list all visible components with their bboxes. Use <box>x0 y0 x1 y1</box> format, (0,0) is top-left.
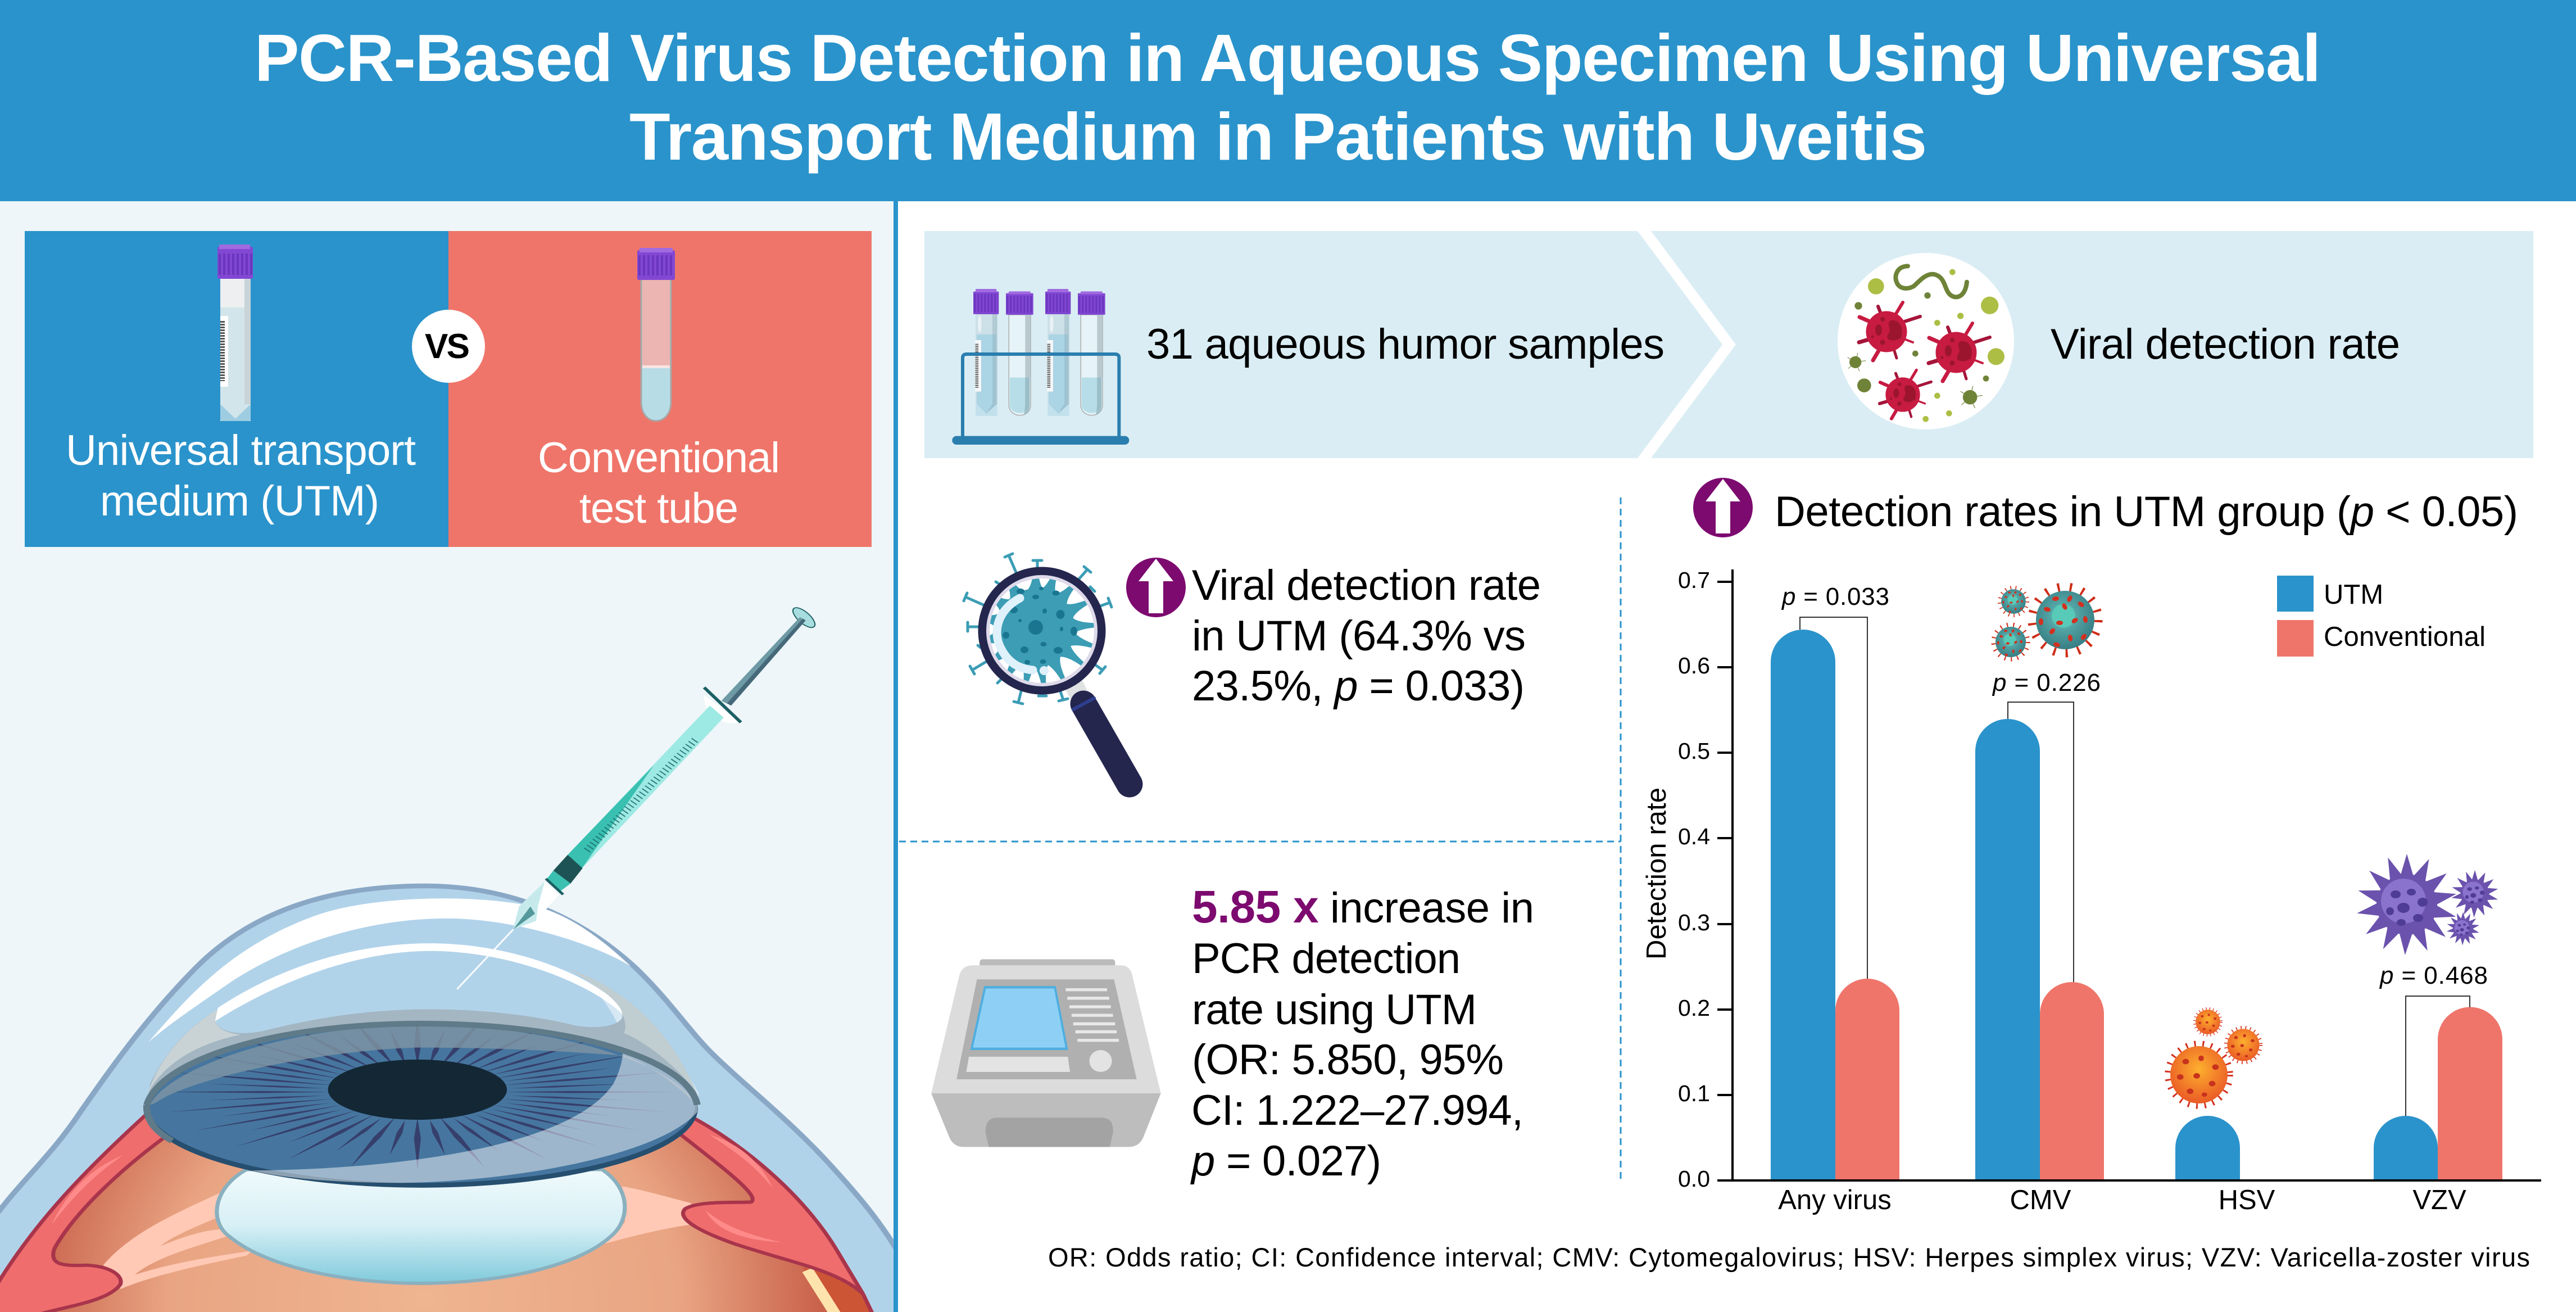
y axis tick labels: 0.6 <box>1678 653 1710 678</box>
p value labels: p = 0.468 <box>2379 962 2488 989</box>
legend <box>2277 576 2486 657</box>
y axis tick labels: 0.3 <box>1678 910 1710 935</box>
icon: UTM tube <box>217 245 253 421</box>
conventional label: test tube <box>579 485 738 532</box>
bars: VZV <box>2374 1007 2502 1180</box>
icon: test tubes in rack <box>952 289 1129 445</box>
outcome label: Viral detection rate <box>2051 320 2400 368</box>
vertical divider <box>894 201 898 1312</box>
vs badge: VS <box>425 327 470 366</box>
finding text: 5.85 x increase in <box>1192 881 1534 933</box>
y axis tick labels: 0.4 <box>1678 824 1710 849</box>
panel: UTM vs conventional comparison <box>25 231 872 547</box>
lens <box>217 1170 625 1283</box>
icon: syringe <box>457 605 819 989</box>
legend: Conventional <box>2324 622 2486 652</box>
cornea highlights <box>148 898 631 1043</box>
section divider lines <box>899 497 1621 1183</box>
y axis title: Detection rate <box>1641 788 1672 960</box>
title: PCR-Based Virus Detection in Aqueous Specimen Using Universal <box>255 21 2321 96</box>
sclera outer layer <box>0 886 897 1312</box>
banner: study design flow <box>924 231 2533 458</box>
y axis tick labels: 0.2 <box>1678 995 1710 1021</box>
bars: CMV <box>1975 719 2104 1180</box>
title: Transport Medium in Patients with Uveitis <box>629 99 1927 174</box>
right ciliary muscle <box>679 1112 863 1294</box>
x axis labels: Any virus <box>1778 1185 1892 1215</box>
icon: up arrow <box>1126 558 1186 617</box>
legend: UTM <box>2324 580 2383 610</box>
chart heading <box>1693 478 2518 537</box>
y axis tick labels: 0.0 <box>1678 1166 1710 1192</box>
y axis tick labels: 0.7 <box>1678 567 1710 593</box>
UTM panel <box>25 231 448 547</box>
x axis labels: CMV <box>2010 1185 2071 1215</box>
illustration: eye with syringe <box>0 605 897 1312</box>
icon: up arrow <box>1693 478 1753 537</box>
finding text: (OR: 5.850, 95% <box>1192 1036 1504 1084</box>
conventional panel <box>448 231 872 547</box>
finding text: in UTM (64.3% vs <box>1192 612 1526 660</box>
y axis tick labels <box>1678 567 1710 1192</box>
eye interior <box>55 1137 827 1312</box>
icon: CMV particles <box>1993 587 2098 659</box>
y axis tick labels: 0.5 <box>1678 738 1710 764</box>
finding text: CI: 1.222–27.994, <box>1191 1087 1523 1134</box>
bars: HSV <box>2175 1116 2240 1180</box>
conventional label: Conventional <box>538 434 780 482</box>
p value labels <box>1781 583 2488 989</box>
bars: any virus <box>1771 630 1899 1180</box>
p value labels: p = 0.033 <box>1781 583 1889 610</box>
left ciliary muscle <box>0 1115 166 1312</box>
heading text: Detection rates in UTM group (p < 0.05) <box>1775 488 2518 536</box>
x axis labels <box>1778 1185 2466 1215</box>
finding text: PCR detection <box>1192 935 1461 983</box>
icon: viruses and bacteria dish <box>1838 253 2014 429</box>
outcome chevron <box>1651 231 2533 458</box>
iris <box>145 1015 698 1188</box>
icon: magnifier over virus <box>964 554 1130 784</box>
choroid corner <box>803 1268 874 1312</box>
finding text: p = 0.027) <box>1191 1137 1381 1185</box>
UTM label: Universal transport <box>66 427 416 474</box>
p value labels: p = 0.226 <box>1992 669 2101 696</box>
zonule fibres <box>103 1186 691 1289</box>
icon: PCR machine <box>931 959 1161 1147</box>
icon: HSV particles <box>2168 1008 2261 1106</box>
cornea glass overlay <box>147 969 699 1183</box>
x axis labels: VZV <box>2412 1185 2466 1215</box>
panel: viral detection finding <box>964 554 1541 784</box>
vs badge <box>412 310 485 383</box>
finding text: 23.5%, p = 0.033) <box>1192 662 1525 710</box>
footnote: OR: Odds ratio; CI: Confidence interval; CMV: Cytomegalovirus; HSV: Herpes simplex virus; VZV: Varicella-zoster virus <box>1048 1242 2530 1272</box>
header banner <box>0 0 2576 201</box>
finding text: rate using UTM <box>1192 986 1477 1034</box>
x axis labels: HSV <box>2219 1185 2275 1215</box>
axes <box>1717 569 2541 1180</box>
y axis tick labels: 0.1 <box>1678 1080 1710 1106</box>
panel: PCR odds ratio finding <box>931 881 1534 1185</box>
bar chart: detection rate by virus <box>1641 567 2541 1215</box>
samples chevron <box>924 231 1722 458</box>
UTM label: medium (UTM) <box>100 477 379 525</box>
icon: conventional tube <box>637 248 675 421</box>
left panel background <box>0 201 894 1312</box>
icon: VZV particles <box>2356 854 2499 955</box>
finding text: Viral detection rate <box>1192 562 1541 609</box>
samples label: 31 aqueous humor samples <box>1146 320 1665 368</box>
significance brackets <box>1800 617 2470 1116</box>
